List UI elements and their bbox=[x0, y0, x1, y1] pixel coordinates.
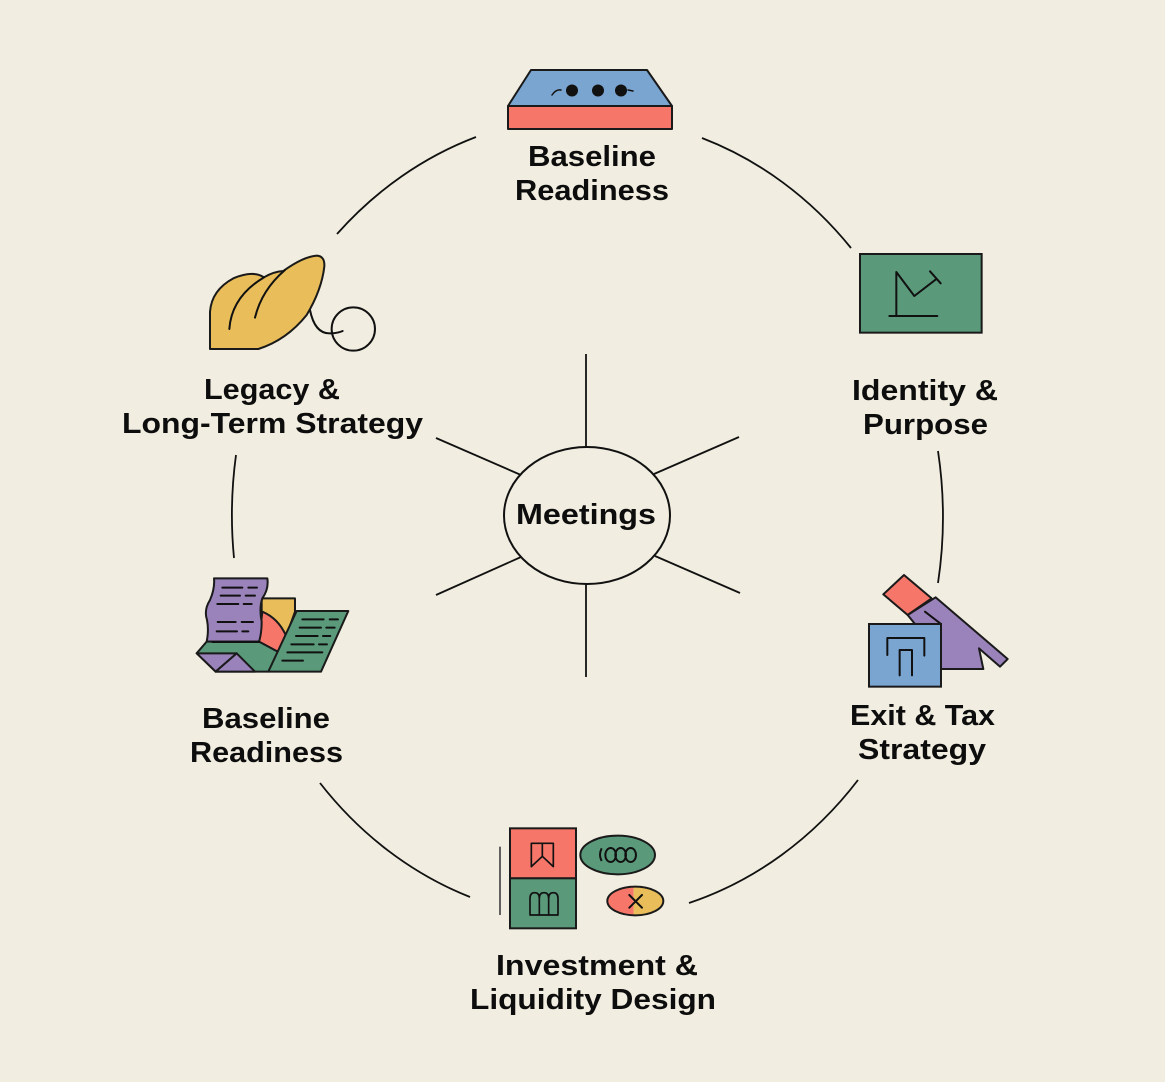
label: Identity and Purpose: Identity & bbox=[852, 375, 998, 407]
label: Identity and Purpose: Purpose bbox=[863, 409, 988, 441]
label: Investment and Liquidity Design bbox=[470, 950, 716, 1016]
label: Identity and Purpose bbox=[852, 375, 998, 441]
label: Legacy and Long-Term Strategy bbox=[122, 374, 423, 440]
label: Investment and Liquidity Design: Liquidity Design bbox=[470, 984, 716, 1016]
label: Investment and Liquidity Design: Investment & bbox=[496, 950, 698, 982]
icon: green chart panel bbox=[860, 254, 982, 333]
icon: exit and tax shapes bbox=[869, 575, 1008, 687]
icon: folded documents bbox=[197, 578, 348, 672]
label: Baseline Readiness left: Baseline bbox=[202, 703, 330, 735]
label: Exit and Tax Strategy bbox=[850, 700, 995, 766]
label: Legacy and Long-Term Strategy: Long-Term Strategy bbox=[122, 408, 423, 440]
label: Baseline Readiness top bbox=[515, 141, 669, 207]
label: Exit and Tax Strategy: Strategy bbox=[858, 734, 986, 766]
central spokes bbox=[436, 354, 740, 677]
icon: yellow leaf with loop bbox=[210, 256, 375, 351]
label: Baseline Readiness top: Readiness bbox=[515, 175, 669, 207]
label: Exit and Tax Strategy: Exit & Tax bbox=[850, 700, 995, 732]
central hub: Meetings bbox=[504, 447, 670, 584]
icon: blue and red platform bbox=[508, 70, 672, 129]
label: Baseline Readiness left: Readiness bbox=[190, 737, 343, 769]
label: Legacy and Long-Term Strategy: Legacy & bbox=[204, 374, 340, 406]
label: Baseline Readiness left bbox=[190, 703, 343, 769]
icon: investment blocks and ovals bbox=[500, 828, 667, 928]
label: Baseline Readiness top: Baseline bbox=[528, 141, 656, 173]
outer cycle ring arcs bbox=[232, 137, 943, 903]
central hub: Meetings: Meetings bbox=[516, 499, 656, 531]
